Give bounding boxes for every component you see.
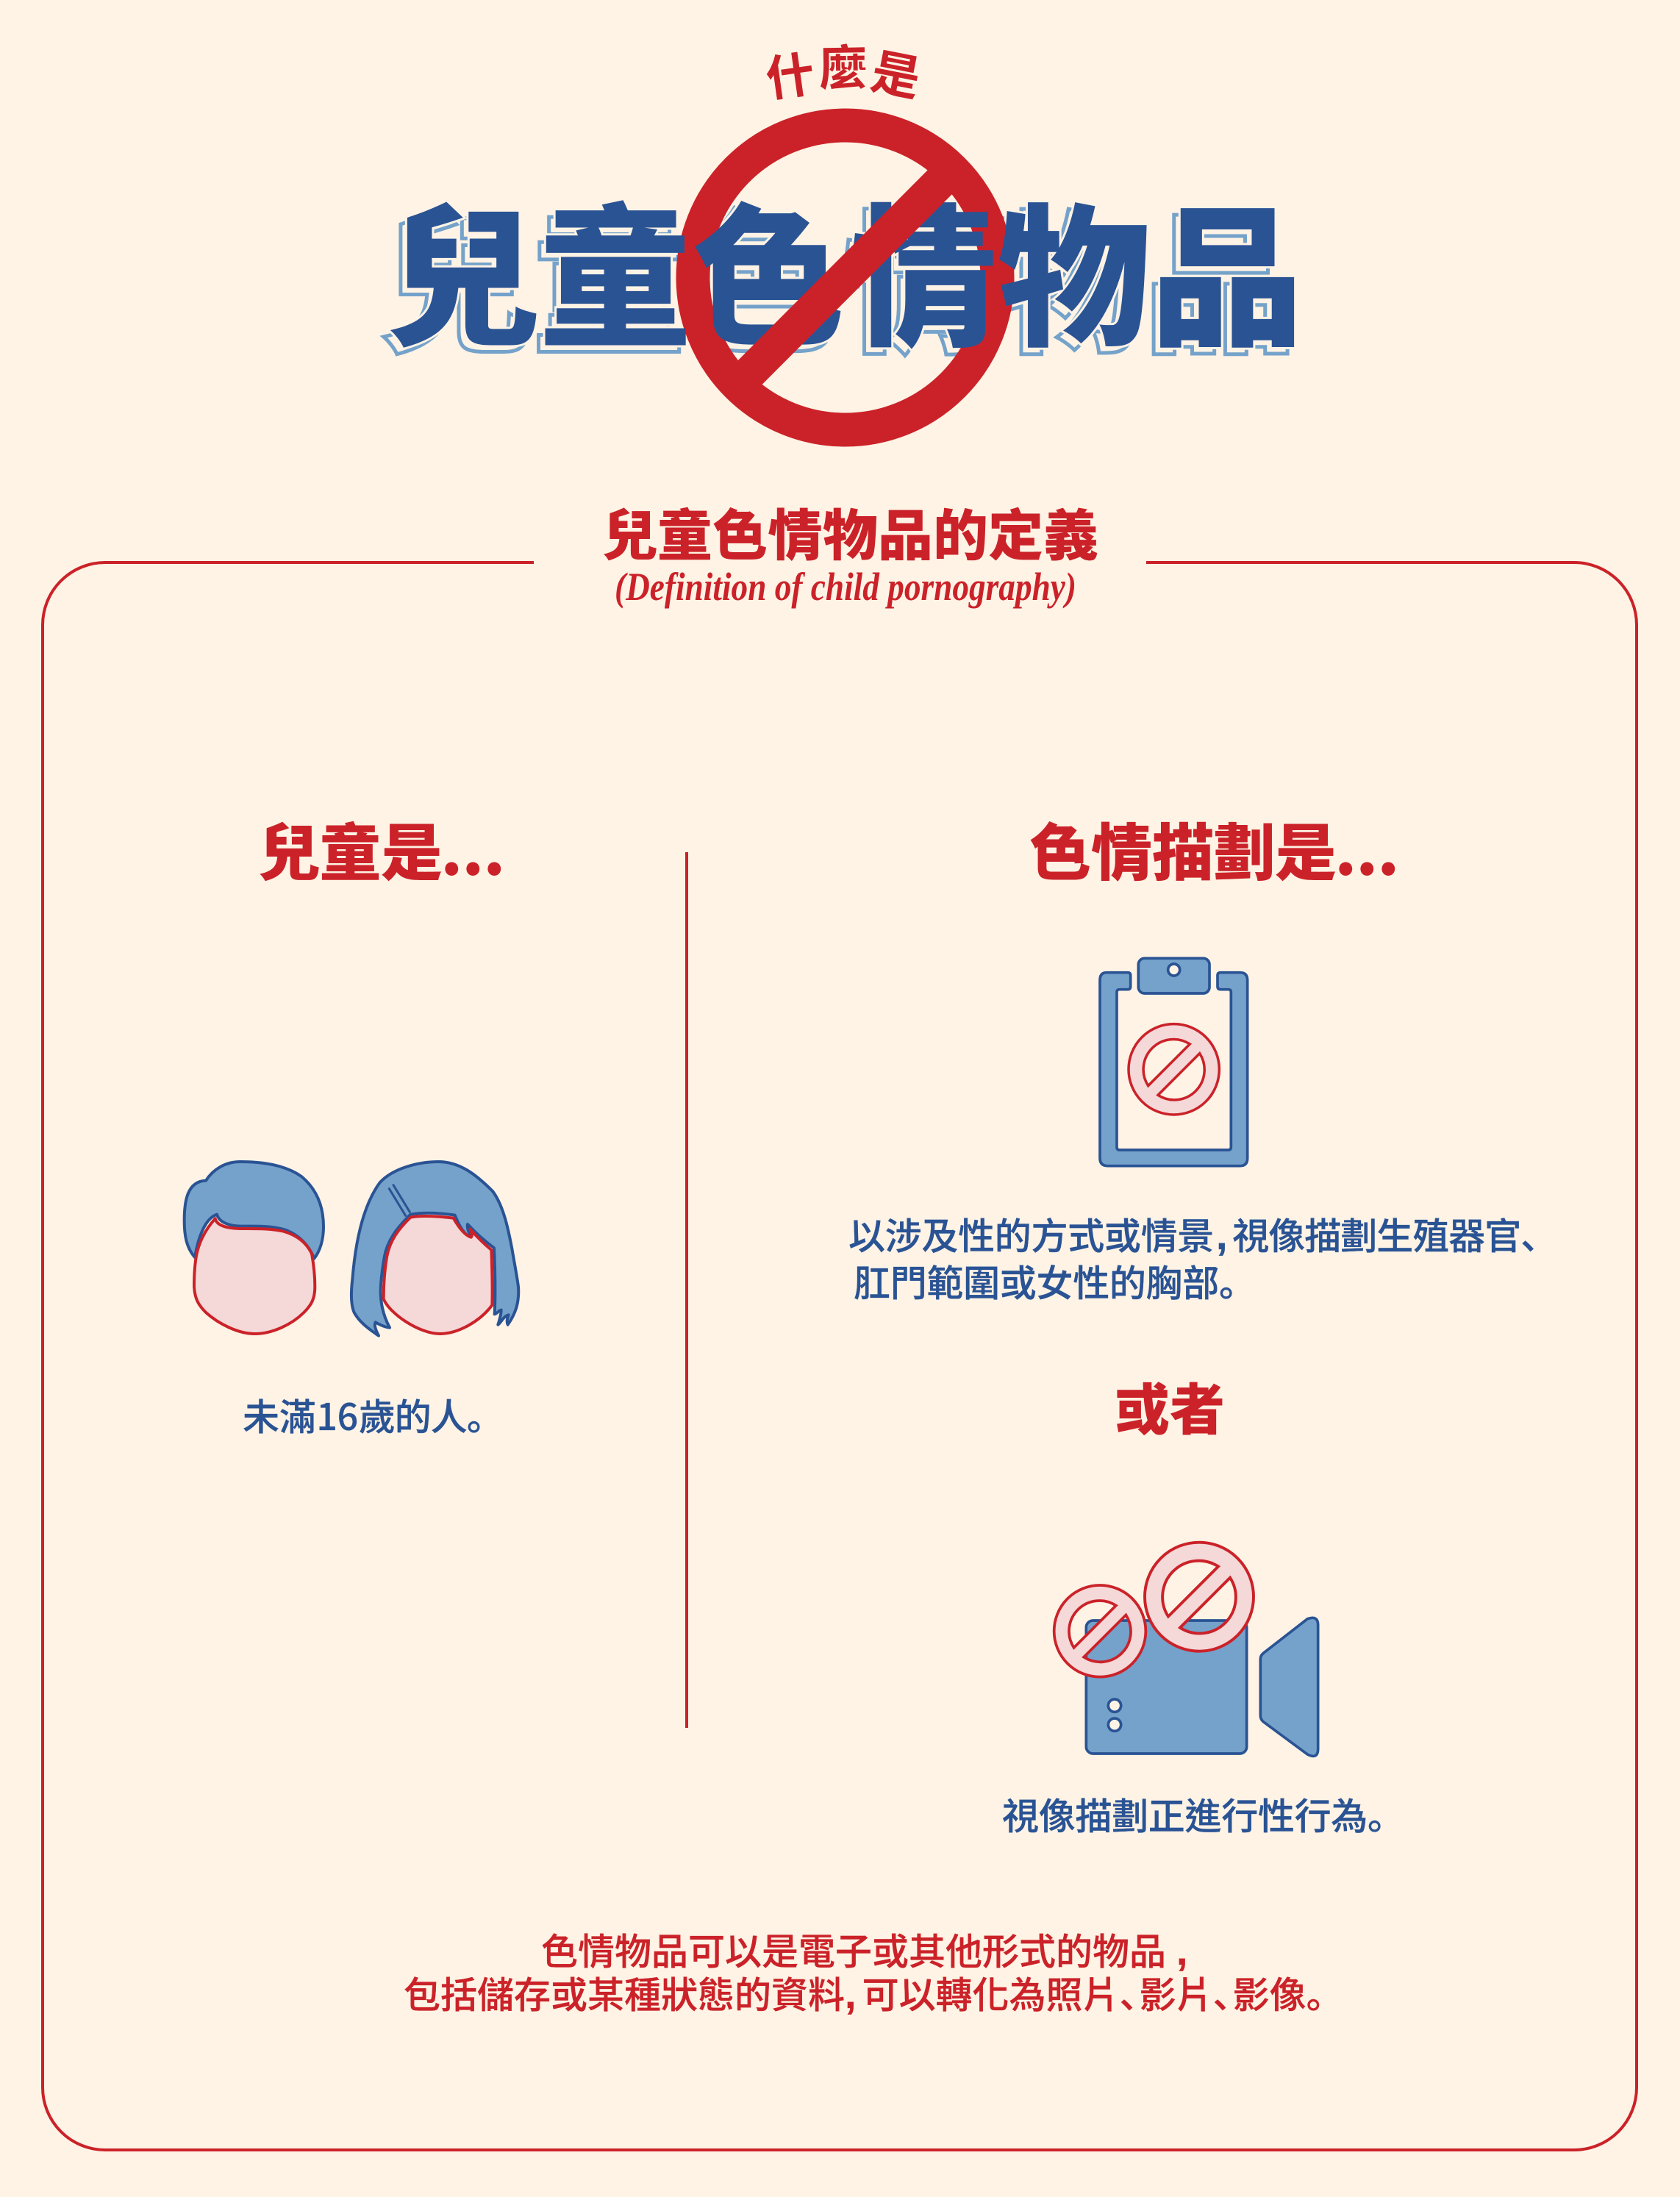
clip hole <box>1168 964 1180 976</box>
girl face <box>384 1216 493 1334</box>
text: child definition: 未滿16歲的人。 <box>243 1388 504 1441</box>
title <box>379 40 1304 429</box>
icon: children heads <box>185 1162 518 1336</box>
camera body <box>1086 1621 1247 1754</box>
panel border <box>43 562 1637 2150</box>
clipboard clip <box>1138 958 1209 993</box>
text: depiction line 1 and 2 <box>848 1212 1557 1304</box>
prohibition ring <box>693 125 997 429</box>
camera lens <box>1260 1618 1318 1756</box>
heading: or: 或者 <box>1115 1379 1225 1441</box>
title shadow outline: 兒童色情物品 <box>379 202 1297 373</box>
title halo separating shadow and main text: 兒童色情物品 <box>386 196 1304 366</box>
no sign small <box>1054 1585 1145 1677</box>
column divider <box>685 852 688 1728</box>
clipboard body <box>1100 973 1248 1166</box>
no sign <box>1129 1024 1219 1115</box>
boy hair <box>185 1162 324 1259</box>
footer note: 包括儲存或某種狀態的資料,可以轉化為照片、影片、影像。 <box>404 1971 1343 2017</box>
boy face <box>194 1218 315 1334</box>
panel: definition <box>43 505 1637 2150</box>
girl hair clip <box>389 1185 410 1215</box>
title kicker: curved text <box>762 40 925 107</box>
camera dots <box>1108 1699 1121 1731</box>
girl hair <box>351 1162 518 1336</box>
no sign large <box>1145 1543 1254 1651</box>
title main text: 兒童色情物品 <box>386 196 1304 366</box>
title kicker: curved text: 什 <box>762 46 818 107</box>
title kicker: curved text: 麼 <box>818 40 868 96</box>
text: depiction line 1 and 2: 以涉及性的方式或情景,視像描劃生殖器官、 <box>848 1212 1557 1258</box>
icon: video camera <box>1054 1543 1318 1756</box>
footer note <box>404 1927 1343 2017</box>
text: video description: 視像描劃正進行性行為。 <box>1002 1796 1404 1837</box>
footer note: 色情物品可以是電子或其他形式的物品 , <box>541 1927 1187 1973</box>
panel subheading: (Definition of child pornography) <box>615 565 1076 609</box>
title kicker: curved text: 是 <box>867 44 925 107</box>
panel heading: 兒童色情物品的定義 <box>602 505 1098 567</box>
heading: depiction: 色情描劃是... <box>1029 804 1398 893</box>
icon: clipboard <box>1100 958 1248 1166</box>
heading: children: 兒童是... <box>258 804 504 893</box>
prohibition slash <box>724 157 965 399</box>
text: depiction line 1 and 2: 肛門範圍或女性的胸部。 <box>854 1263 1256 1304</box>
